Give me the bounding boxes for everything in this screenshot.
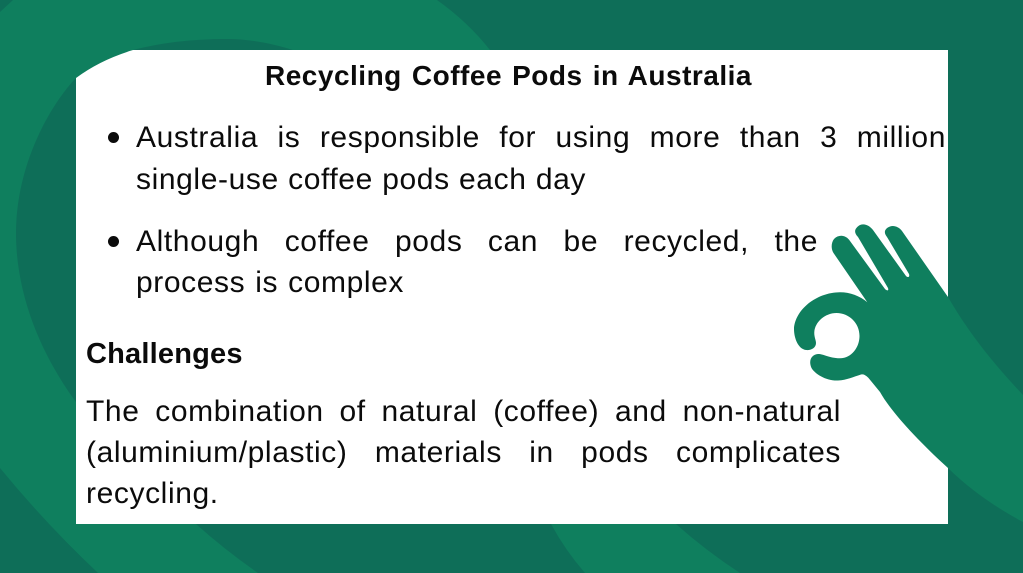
- heading: challenges: Challenges: [86, 338, 243, 370]
- challenges text line 1: The combination of natural (coffee) and non-natural: [86, 395, 841, 428]
- bullet 1 line 1: Australia is responsible for using more than 3 million: [136, 121, 946, 154]
- bullet 2 line 1: Although coffee pods can be recycled, the: [136, 225, 818, 258]
- bullet marker 1: [108, 132, 119, 143]
- title: Recycling Coffee Pods in Australia: [265, 60, 752, 91]
- challenges text line 3: recycling.: [86, 477, 219, 510]
- challenges text line 2: (aluminium/plastic) materials in pods complicates: [86, 436, 841, 469]
- bullet 2 line 2: process is complex: [136, 266, 404, 299]
- bullet marker 2: [108, 236, 119, 247]
- bullet 1 line 2: single-use coffee pods each day: [136, 163, 586, 196]
